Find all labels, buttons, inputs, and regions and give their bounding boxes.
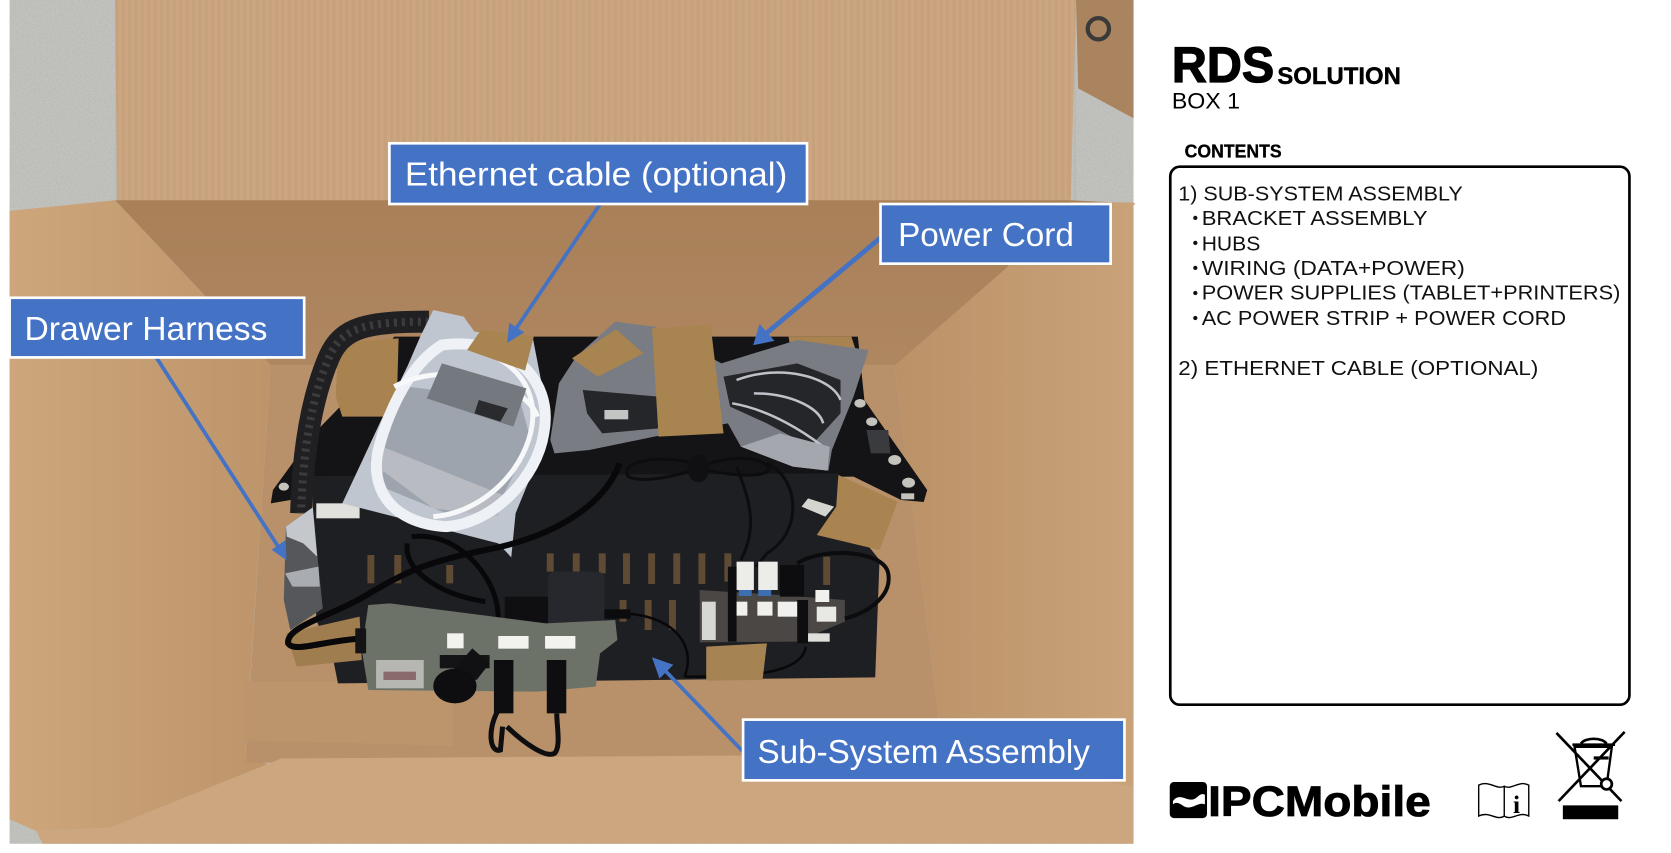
title: RDS solution: SOLUTION	[1277, 63, 1401, 90]
panel: contents list: BRACKET ASSEMBLY	[1202, 207, 1428, 230]
front flap	[36, 754, 1134, 844]
lower plugs	[494, 660, 513, 713]
title: RDS solution: RDS	[1172, 37, 1274, 93]
icon: read the manual	[1479, 784, 1529, 819]
distant box in top right	[1076, 0, 1134, 118]
bundled black usb cable	[627, 454, 793, 567]
serial sticker on panel	[316, 503, 360, 518]
bag with ethernet cable	[342, 310, 547, 557]
arrow: power cord	[753, 237, 882, 345]
back inner wall	[115, 200, 1136, 365]
rack bolts	[279, 399, 915, 499]
drawer harness braided cable	[284, 322, 429, 630]
inner base sheet	[245, 365, 940, 763]
fuse box	[376, 660, 424, 688]
arrow: drawer harness	[157, 358, 287, 560]
label: sub-system assembly	[743, 720, 1124, 780]
panel: contents list: WIRING (DATA+POWER)	[1202, 257, 1465, 280]
black power cables	[288, 463, 806, 677]
remove tape right	[817, 475, 898, 550]
heading: contents: CONTENTS	[1185, 142, 1282, 162]
label: power cord: Power Cord	[898, 216, 1074, 253]
icon: WEEE crossed-out bin	[1556, 732, 1625, 819]
panel: contents list: 2) ETHERNET CABLE (OPTIONAL)	[1178, 357, 1538, 380]
label: power cord	[881, 204, 1111, 264]
connector A	[802, 498, 834, 517]
bag with power cord	[550, 322, 869, 471]
panel: contents list: POWER SUPPLIES (TABLET+PRINTERS)	[1202, 281, 1620, 304]
rear rack frame	[271, 337, 927, 503]
panel: contents list: AC POWER STRIP + POWER CORD	[1202, 307, 1566, 330]
power adapter	[505, 572, 630, 653]
panel: contents list: 1) SUB-SYSTEM ASSEMBLY	[1178, 182, 1463, 205]
front black panel	[312, 473, 880, 683]
title: RDS solution	[1172, 37, 1401, 93]
floor background	[10, 0, 1134, 844]
plug	[451, 648, 490, 680]
usb hub	[700, 553, 889, 643]
label: ethernet cable	[389, 143, 807, 204]
photo: open cardboard box	[10, 0, 1136, 844]
logo: IPCMobile: IPCMobile	[1208, 778, 1431, 826]
ventilation slots	[367, 553, 830, 630]
tape behind bags	[336, 338, 399, 417]
outlet labels	[447, 633, 464, 648]
remove tape bottom	[706, 643, 767, 681]
arrow: ethernet cable	[507, 205, 600, 343]
power strip	[355, 603, 617, 754]
label: ethernet cable: Ethernet cable (optional)	[405, 155, 787, 192]
back flap of box	[115, 0, 1076, 205]
left flap and wall	[10, 200, 281, 831]
label: sub-system assembly: Sub-System Assembly	[757, 733, 1090, 770]
right flap and wall	[895, 202, 1134, 794]
label: drawer harness: Drawer Harness	[25, 310, 267, 347]
label: drawer harness	[10, 298, 304, 357]
cable label	[427, 363, 526, 427]
icon: read the manual: i	[1513, 790, 1520, 819]
photo contents traced in close-up coordinates	[271, 310, 927, 754]
panel: contents list	[1170, 167, 1629, 705]
subtitle: box 1: BOX 1	[1172, 89, 1240, 114]
panel: contents list: HUBS	[1202, 232, 1260, 255]
arrow: sub-system assembly	[652, 657, 743, 751]
